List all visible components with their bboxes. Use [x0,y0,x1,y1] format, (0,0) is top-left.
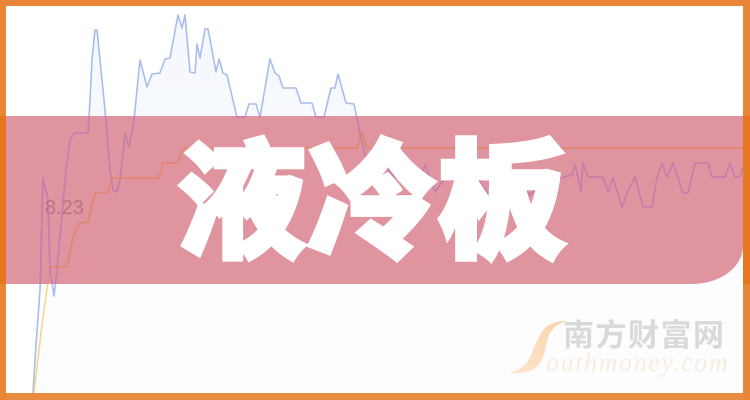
icon: swoosh S [508,321,567,373]
watermark logo [508,318,729,377]
chart value label: 8.23 [45,197,84,219]
pink title band [6,116,743,284]
purple line through band [40,116,743,284]
title: 液冷板 [178,132,568,275]
orange line [50,132,743,267]
lines seen through band [40,116,743,284]
watermark chinese name: 南方财富网 [563,318,726,353]
watermark domain: outhmoney.com [546,348,729,377]
yellow line segment [34,267,50,393]
